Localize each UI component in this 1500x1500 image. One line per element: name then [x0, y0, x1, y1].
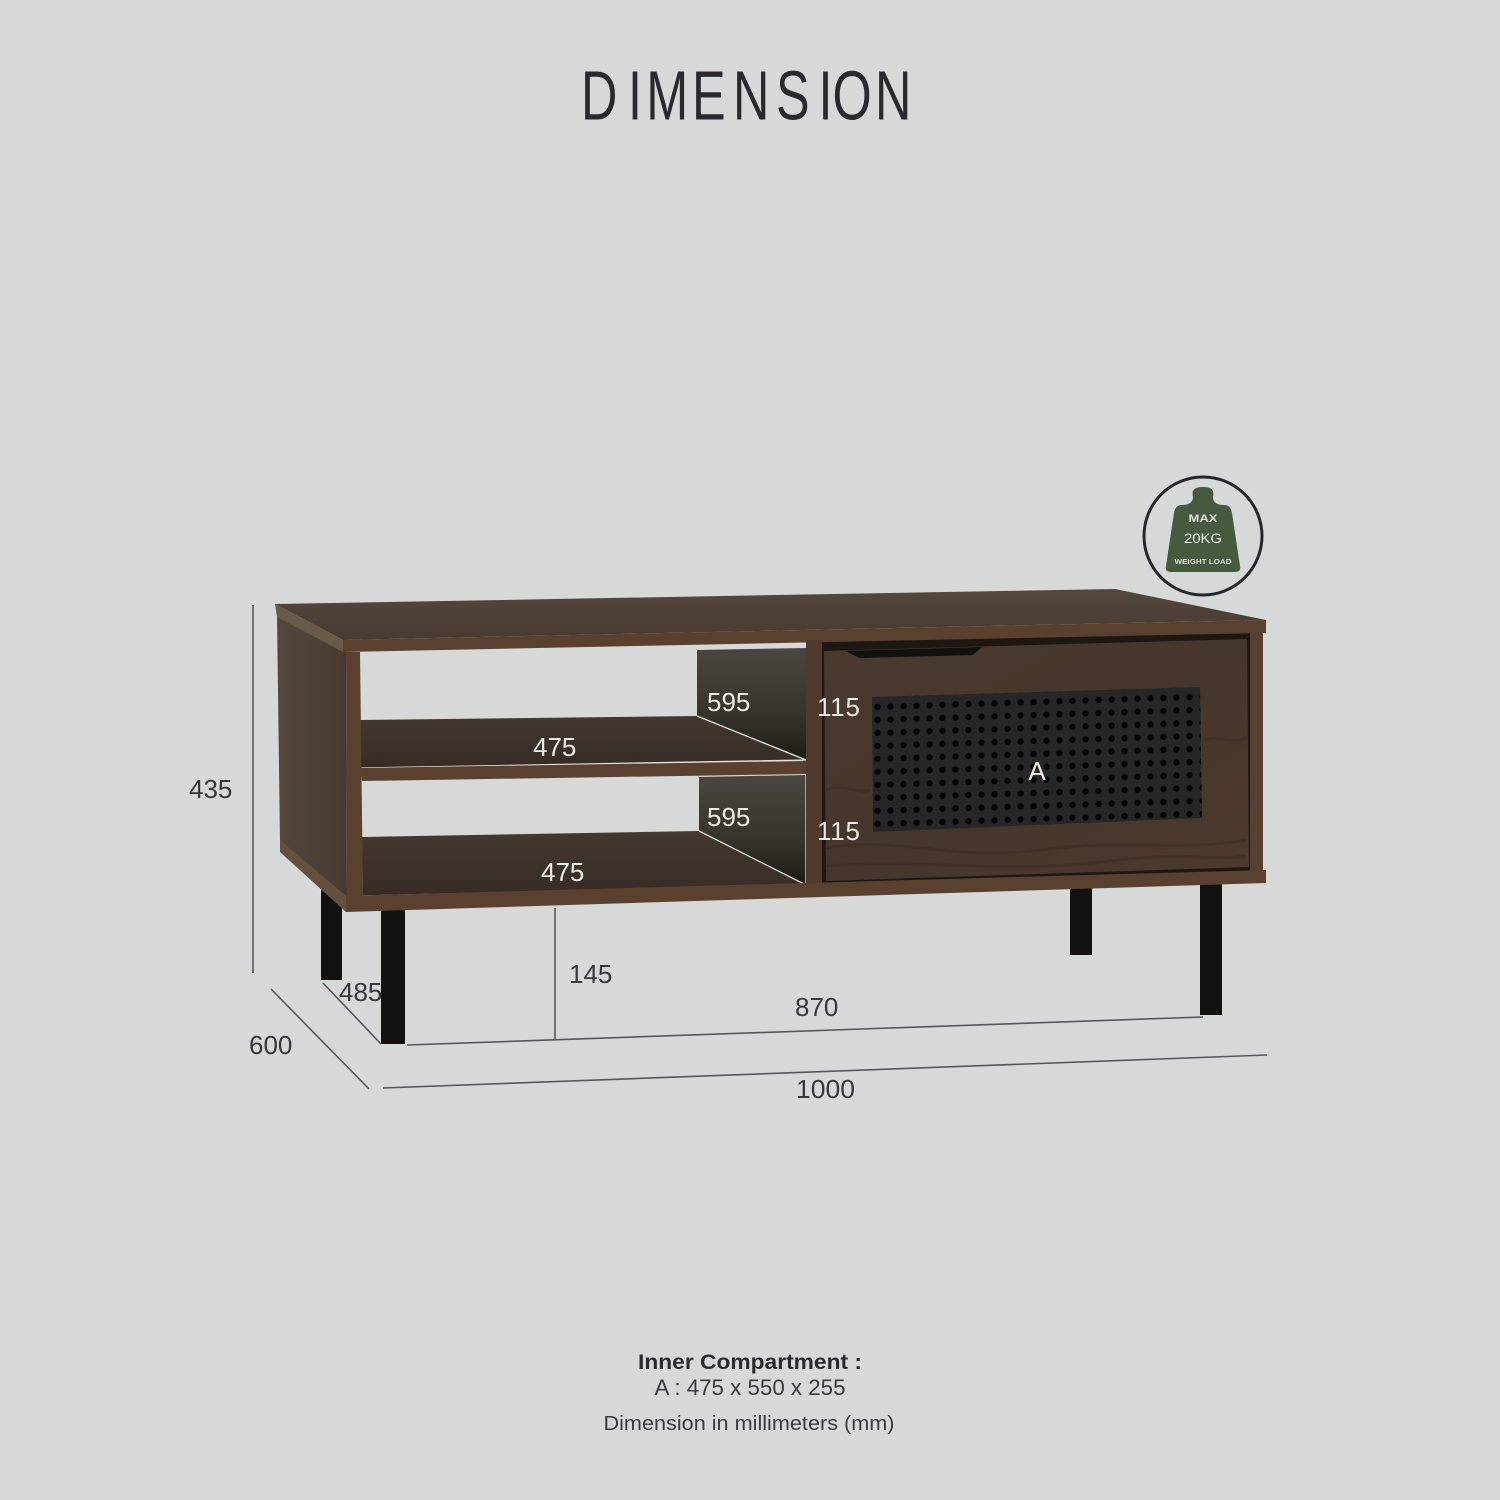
left side panel	[277, 615, 347, 897]
height 435: 435	[189, 774, 232, 804]
lower shelf bay	[362, 775, 806, 897]
drawer cavity backing	[806, 628, 1263, 895]
height line	[252, 605, 254, 973]
outside dimension labels	[189, 774, 855, 1104]
compartment dimensions: A : 475 x 550 x 255	[654, 1375, 846, 1400]
upper width 475: 475	[533, 732, 576, 762]
lower bay back wall	[699, 775, 806, 886]
outer depth line	[271, 989, 369, 1089]
footer notes	[604, 1350, 894, 1435]
width line	[383, 1055, 1267, 1088]
table top left edge	[275, 604, 343, 652]
wood grain	[826, 738, 1246, 867]
upper shelf edge highlights	[361, 716, 806, 768]
inner compartment heading: Inner Compartment :	[638, 1350, 862, 1374]
upper bay back wall	[697, 648, 806, 762]
coffee table illustration	[275, 589, 1266, 1044]
dimension lines	[253, 605, 1267, 1089]
lower shelf surface	[362, 831, 806, 897]
handle	[845, 647, 982, 658]
centre divider pillar	[806, 640, 822, 890]
lower width 475: 475	[541, 857, 584, 887]
badge text: max: MAX	[1188, 513, 1218, 525]
perforated mesh panel	[872, 687, 1202, 832]
right pillar	[1250, 632, 1263, 872]
inside dimension labels	[533, 687, 1046, 887]
badge ring	[1144, 477, 1262, 595]
weight icon	[1166, 487, 1240, 572]
table top surface	[275, 589, 1266, 640]
title: DIMENSION	[581, 56, 911, 134]
upper shelf bay	[360, 648, 806, 768]
weight load badge	[1144, 477, 1262, 595]
front left leg	[381, 905, 405, 1044]
clearance 145: 145	[569, 959, 612, 989]
inner depth line	[323, 983, 381, 1044]
table top front edge	[343, 620, 1266, 652]
unit note: Dimension in millimeters (mm)	[604, 1413, 894, 1435]
leg span line	[407, 1017, 1203, 1045]
lower shelf edge highlights	[363, 775, 806, 896]
upper depth 595: 595	[707, 687, 750, 717]
badge text: 20kg: 20KG	[1184, 530, 1222, 546]
front right leg	[1200, 880, 1222, 1015]
width 1000: 1000	[796, 1074, 855, 1104]
back left leg	[321, 885, 342, 980]
span 870: 870	[795, 992, 838, 1022]
upper shelf surface	[360, 716, 806, 768]
door panel	[824, 639, 1249, 881]
back right leg	[1070, 885, 1092, 955]
bottom left rail	[280, 840, 346, 912]
badge text: weight load: WEIGHT LOAD	[1174, 559, 1232, 566]
bottom margin 115: 115	[817, 816, 860, 846]
depth 600: 600	[249, 1030, 292, 1060]
clearance line	[554, 908, 556, 1040]
drawer door	[824, 639, 1249, 881]
bottom front rail	[343, 870, 1266, 912]
lower depth 595: 595	[707, 802, 750, 832]
top margin 115: 115	[817, 692, 860, 722]
left front pillar	[346, 652, 363, 897]
inner depth 485: 485	[339, 977, 382, 1007]
shelf front edge	[361, 761, 806, 781]
compartment A: A	[1028, 756, 1046, 786]
